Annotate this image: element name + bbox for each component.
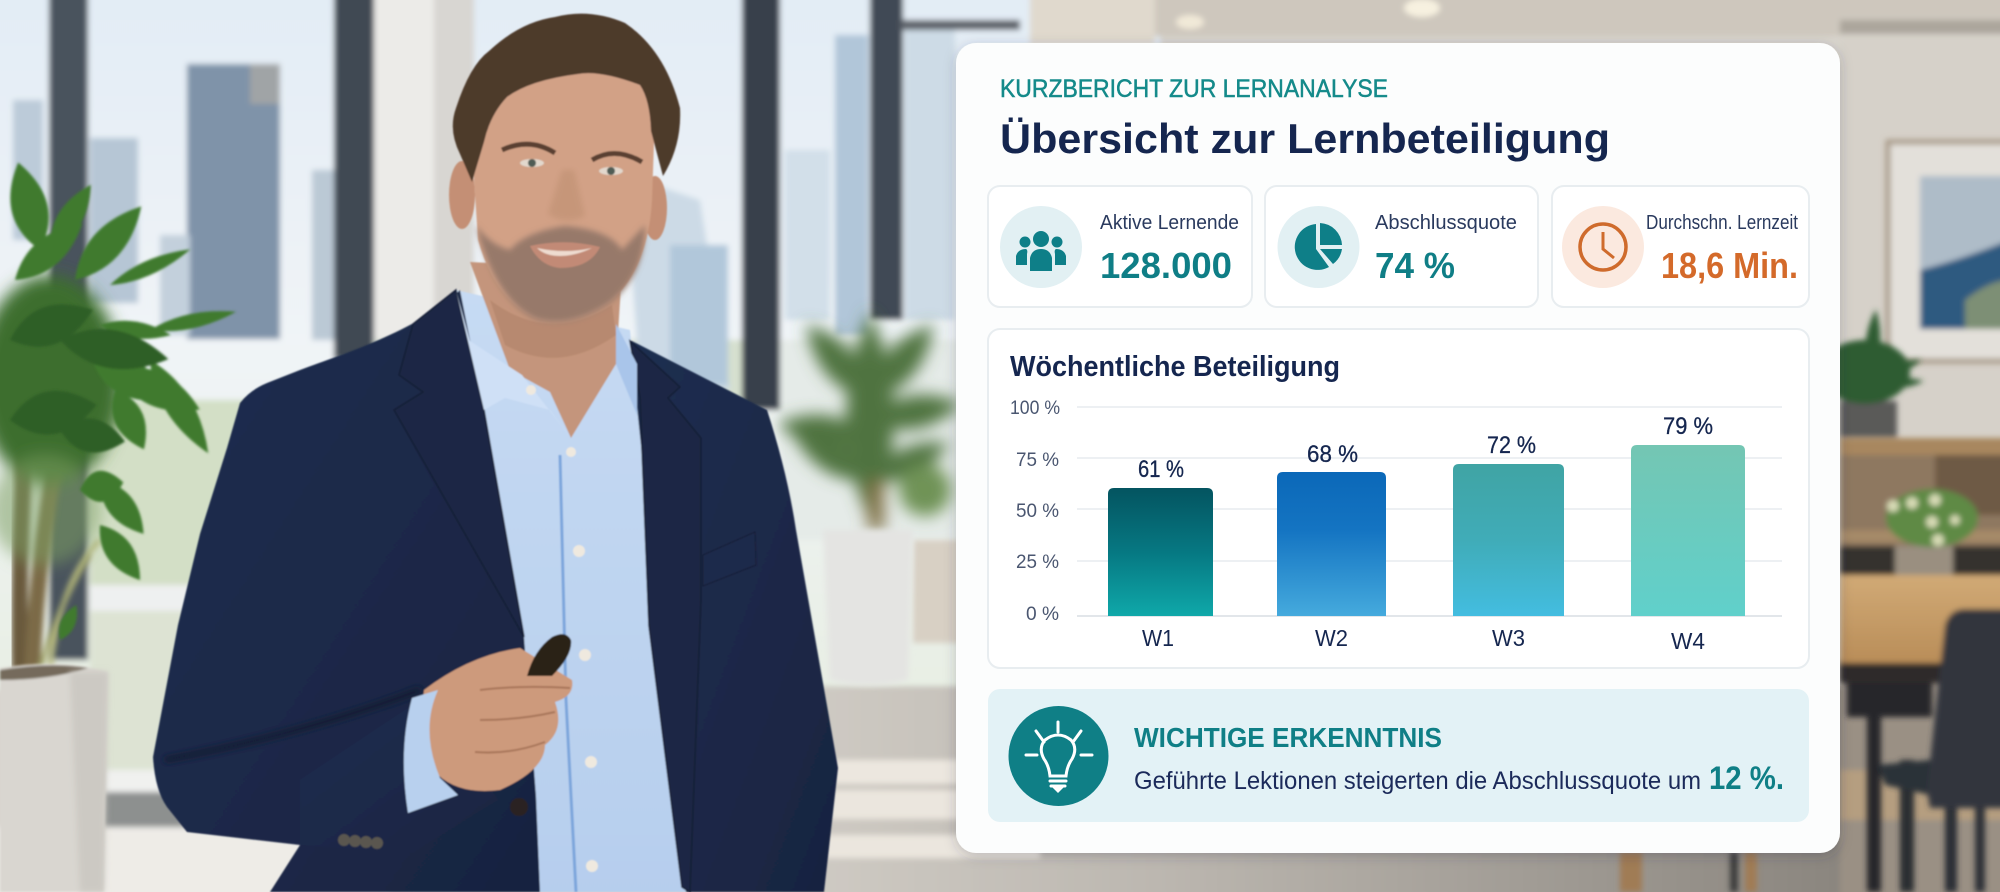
jacket button bbox=[510, 798, 528, 816]
lapels bbox=[394, 290, 524, 637]
jacket pocket bbox=[703, 532, 756, 586]
value: 128.000 bbox=[1100, 245, 1232, 286]
hand bbox=[423, 634, 572, 791]
callout: key insight bbox=[988, 689, 1809, 822]
blazer bbox=[153, 290, 838, 892]
shirt cuff bbox=[404, 690, 458, 813]
week labels bbox=[1142, 625, 1705, 654]
value: 74 % bbox=[1375, 245, 1455, 286]
skyline bbox=[13, 30, 955, 390]
week labels: W1 bbox=[1142, 625, 1174, 651]
painting bbox=[1888, 142, 2000, 361]
label: Aktive Lernende bbox=[1100, 212, 1239, 234]
left plant and pot bbox=[0, 158, 238, 892]
y axis labels: 0 % bbox=[1026, 604, 1059, 625]
icon: clock bbox=[1562, 206, 1644, 288]
bar value labels: 61 % bbox=[1138, 456, 1184, 483]
shirt bbox=[456, 290, 686, 892]
shirt collar bbox=[456, 290, 571, 438]
week labels: W2 bbox=[1315, 625, 1348, 651]
rail and sill bbox=[90, 585, 255, 611]
pot bbox=[0, 664, 108, 892]
y axis labels: 75 % bbox=[1016, 450, 1059, 471]
icon: people bbox=[1000, 206, 1082, 288]
floor bbox=[0, 827, 390, 892]
week labels: W3 bbox=[1492, 625, 1525, 651]
presenter: man in navy blazer holding a clicker bbox=[153, 14, 838, 892]
label: Durchschn. Lernzeit bbox=[1646, 212, 1798, 234]
chart title: Wöchentliche Beteiligung bbox=[1010, 351, 1340, 383]
bar value labels: 72 % bbox=[1487, 432, 1536, 459]
right room: shelf, plants, table, chair bbox=[1620, 309, 2000, 892]
callout sentence: Geführte Lektionen steigerten die Abschlussquote um bbox=[1134, 767, 1701, 795]
eyes and brows bbox=[502, 144, 642, 175]
middle plant and pot bbox=[775, 311, 965, 685]
panel: KPI average learning time bbox=[1552, 186, 1809, 307]
bar value labels: 79 % bbox=[1663, 413, 1713, 440]
panel: dashboard card bbox=[956, 43, 1840, 853]
icon: pie chart bbox=[1278, 206, 1360, 288]
neck and chest bbox=[470, 262, 622, 438]
y axis labels: 25 % bbox=[1016, 552, 1059, 573]
week labels: W4 bbox=[1671, 628, 1705, 654]
panel: KPI active learners bbox=[988, 186, 1252, 307]
ears bbox=[449, 161, 475, 229]
hair bbox=[453, 14, 680, 182]
eyebrow heading: KURZBERICHT ZUR LERNANALYSE bbox=[1000, 75, 1388, 103]
bar chart bbox=[1108, 445, 1745, 616]
y axis labels: 100 % bbox=[1010, 398, 1060, 419]
nose bbox=[548, 170, 585, 221]
title: Übersicht zur Lernbeteiligung bbox=[1000, 115, 1610, 162]
callout heading: WICHTIGE ERKENNTNIS bbox=[1134, 722, 1442, 753]
clicker bbox=[527, 634, 571, 676]
shirt placket and buttons bbox=[526, 385, 598, 892]
highlighted number: 12 %. bbox=[1709, 760, 1784, 796]
icon: light bulb bbox=[1008, 706, 1108, 806]
y axis labels: 50 % bbox=[1016, 501, 1059, 522]
panel: weekly participation chart bbox=[988, 329, 1809, 668]
bar value labels: 68 % bbox=[1307, 441, 1358, 468]
y axis labels bbox=[1010, 398, 1060, 625]
bar value labels bbox=[1138, 413, 1713, 483]
face bbox=[470, 69, 656, 321]
label: Abschlussquote bbox=[1375, 212, 1517, 234]
value: 18,6 Min. bbox=[1661, 245, 1798, 286]
sleeve buttons bbox=[338, 834, 383, 849]
beard stubble bbox=[476, 225, 645, 322]
panel: KPI completion rate bbox=[1265, 186, 1538, 307]
window frames bbox=[49, 0, 88, 660]
pillar bbox=[374, 0, 434, 340]
